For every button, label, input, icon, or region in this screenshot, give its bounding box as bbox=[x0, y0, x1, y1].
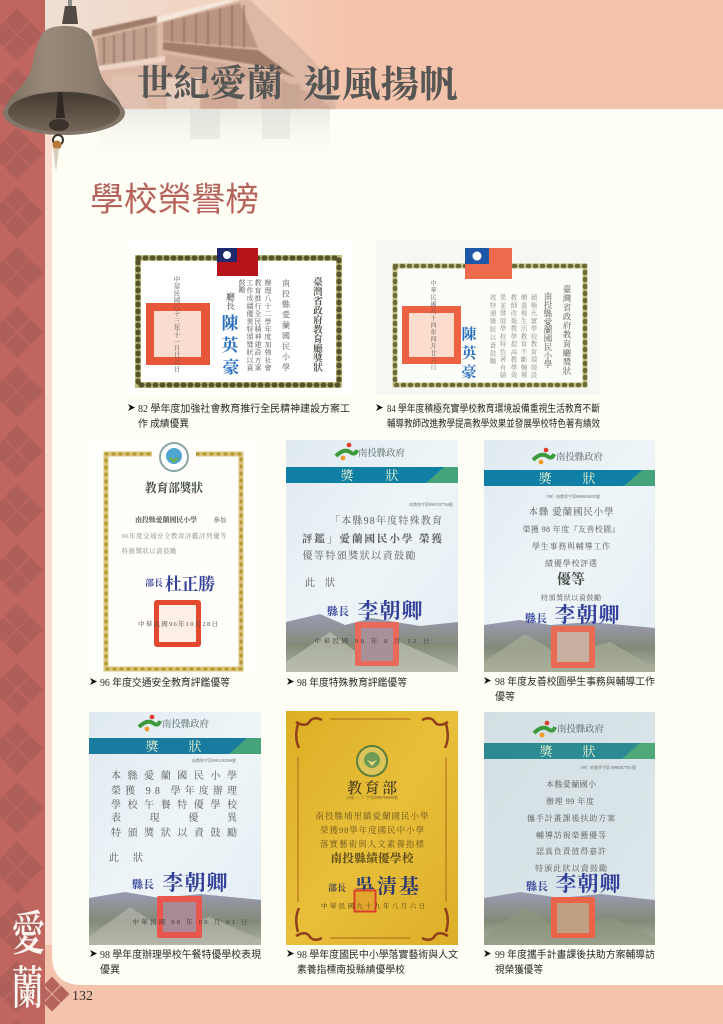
certificate 6: school lunch award: 府教特字第0981192569號 bbox=[192, 757, 236, 763]
caption 2: 輔導教師改進教學提高教學效果並發展學校特色著有績效 bbox=[387, 417, 600, 430]
certificate 2: Education department award bbox=[376, 240, 600, 395]
certificate 4: Nantou County special education award: 中華民國 98 年 8 月 12 日 bbox=[314, 636, 430, 645]
cream content panel bbox=[52, 109, 723, 985]
caption 6: 優異 bbox=[100, 963, 120, 976]
caption 1 bbox=[128, 402, 350, 430]
county logo: 南投縣政府 bbox=[557, 723, 604, 735]
certificate 4: Nantou County special education award: 獎 bbox=[340, 468, 354, 483]
certificate 3: Ministry of Education traffic safety award: 南投縣愛蘭國民小學 bbox=[135, 515, 197, 524]
certificate 6: school lunch award: 本縣愛蘭國民小學 bbox=[111, 769, 237, 782]
certificate 5: friendly campus award: 獎 bbox=[538, 471, 552, 486]
caption 7 bbox=[287, 948, 459, 976]
certificate 1: Taiwan Provincial education award: 教育推行全民精神建設方案 bbox=[254, 278, 262, 372]
certificate 2: Education department award: 豪 bbox=[461, 363, 477, 381]
certificate 1: Taiwan Provincial education award: 南投縣愛蘭國民小學 bbox=[280, 278, 290, 371]
certificate 3: Ministry of Education traffic safety award: 96年度交通安全教育評鑑評列優等 bbox=[122, 531, 227, 540]
caption 8: 視榮獲優等 bbox=[495, 963, 543, 976]
certificate 2: Education department award: 備重視生活教育不斷輔導 bbox=[520, 293, 527, 379]
caption 2 bbox=[376, 402, 600, 430]
certificate 1: Taiwan Provincial education award: 臺灣省政府教育廳獎狀 bbox=[311, 276, 323, 373]
certificate 6: school lunch award: 表 現 優 異 bbox=[111, 811, 238, 824]
left side strip with diamonds bbox=[0, 0, 45, 1024]
certificate 7: gold Ministry of Education award: 台國（二）字第0980700098號 bbox=[346, 794, 398, 800]
county logo bbox=[139, 715, 209, 731]
certificate 5: friendly campus award: 特頒獎狀以資鼓勵 bbox=[541, 593, 601, 602]
blue band bbox=[484, 743, 655, 759]
certificate 6: school lunch award: 中華民國 98 年 09 月 01 日 bbox=[132, 917, 248, 926]
certificate 4: Nantou County special education award: 優等特頒獎狀以資鼓勵 bbox=[302, 549, 416, 562]
mountains bbox=[89, 892, 261, 945]
certificate 3: Ministry of Education traffic safety award: 特頒獎狀以資鼓勵 bbox=[122, 546, 177, 555]
certificate 3: Ministry of Education traffic safety award: 參加 bbox=[214, 515, 227, 524]
certificate 4: Nantou County special education award: 「本縣98年度特殊教育 bbox=[330, 514, 442, 527]
certificate 8: after-school tutoring award: 狀 bbox=[582, 744, 596, 759]
county logo: 南投縣政府 bbox=[162, 718, 209, 730]
certificate 1: Taiwan Provincial education award: 陳 bbox=[222, 314, 238, 333]
certificate 2: Education department award: 英 bbox=[461, 344, 477, 362]
red seal bbox=[402, 306, 461, 364]
certificate 7: gold Ministry of Education award: 中華民國九十九年八月六日 bbox=[321, 901, 425, 910]
red seal bbox=[354, 890, 376, 912]
mountains bbox=[484, 620, 655, 672]
certificate 1: Taiwan Provincial education award bbox=[128, 240, 352, 395]
certificate 8: after-school tutoring award: 認真負責值得嘉許 bbox=[536, 846, 606, 856]
certificate 8: after-school tutoring award: 縣長 bbox=[526, 879, 548, 893]
caption 2: 84 學年度積極充實學校教育環境設備重視生活教育不斷 bbox=[387, 402, 600, 415]
mountains bbox=[484, 892, 655, 945]
caption 7: 素養指標南投縣績優學校 bbox=[297, 963, 406, 976]
certificate 8: after-school tutoring award: 特頒此狀以資鼓勵 bbox=[535, 863, 607, 873]
certificate 2: Education department award: 臺灣省政府教育廳獎狀 bbox=[562, 284, 572, 376]
header title bbox=[137, 63, 458, 106]
certificate 2: Education department award: 效特頒獎狀以資鼓勵 bbox=[488, 293, 496, 365]
certificate 4: Nantou County special education award bbox=[286, 440, 458, 672]
caption 1: 作 成績優異 bbox=[138, 417, 189, 430]
certificate 7: gold Ministry of Education award: 吳清基 bbox=[355, 874, 419, 898]
certificate 4: Nantou County special education award: 李朝卿 bbox=[358, 599, 422, 623]
certificate 5: friendly campus award bbox=[484, 440, 655, 672]
certificate 1: Taiwan Provincial education award: 豪 bbox=[222, 357, 240, 377]
certificate 8: after-school tutoring award: 獎 bbox=[539, 744, 553, 759]
caption 5 bbox=[484, 675, 655, 703]
certificate 1: Taiwan Provincial education award: 英 bbox=[222, 335, 240, 355]
certificate 7: gold Ministry of Education award: 教育部 bbox=[347, 779, 397, 797]
certificate 8: after-school tutoring award: 輔導訪視榮獲優等 bbox=[536, 830, 606, 840]
certificate 5: friendly campus award: （98）南教學字第0990056555號 bbox=[544, 493, 600, 499]
caption 1: 82 學年度加強社會教育推行全民精神建設方案工 bbox=[138, 402, 350, 415]
certificate 6: school lunch award: 縣長 bbox=[132, 877, 154, 891]
page number: 132 bbox=[72, 989, 93, 1004]
mountains bbox=[286, 614, 458, 672]
certificate 1: Taiwan Provincial education award: 廳長 bbox=[225, 291, 235, 311]
blue band bbox=[484, 470, 655, 486]
certificate 6: school lunch award bbox=[89, 712, 261, 945]
certificate 3: Ministry of Education traffic safety award: 教育部獎狀 bbox=[145, 480, 204, 495]
flag bbox=[217, 248, 258, 276]
caption 8: 99 年度攜手計畫課後扶助方案輔導訪 bbox=[495, 948, 655, 961]
certificate 1: Taiwan Provincial education award: 鼓勵 bbox=[238, 278, 246, 294]
blue band bbox=[286, 467, 458, 483]
certificate 7: gold Ministry of Education award: 部長 bbox=[328, 882, 346, 893]
red seal bbox=[146, 303, 210, 365]
certificate 5: friendly campus award: 縣長 bbox=[525, 611, 547, 625]
certificate 6: school lunch award: 獎 bbox=[145, 739, 159, 754]
certificate 4: Nantou County special education award: 此 狀 bbox=[305, 576, 335, 589]
certificate 8: after-school tutoring award: 本縣愛蘭國小 bbox=[546, 779, 597, 789]
certificate 2: Education department award: 教師改進教學提高教學效 bbox=[510, 293, 517, 379]
certificate 2: Education department award: 南投縣愛蘭國民小學 bbox=[543, 291, 553, 368]
certificate 8: after-school tutoring award bbox=[484, 712, 655, 945]
certificate 6: school lunch award: 狀 bbox=[188, 739, 202, 754]
certificate 4: Nantou County special education award: 縣長 bbox=[327, 604, 349, 618]
certificate 2: Education department award: 陳 bbox=[461, 326, 477, 343]
certificate 8: after-school tutoring award: 攜手計畫課後扶助方案 bbox=[527, 813, 615, 823]
certificate 3: Ministry of Education traffic safety award: 中華民國96年10月28日 bbox=[138, 619, 218, 628]
certificate 7: gold Ministry of Education award: 南投縣埔里鎮愛蘭國民小學 bbox=[316, 811, 429, 821]
certificate 4: Nantou County special education award: 南教特字第0991197704號 bbox=[409, 501, 453, 507]
caption 7: 98 學年度國民中小學落實藝術與人文 bbox=[297, 948, 459, 961]
county logo bbox=[533, 448, 603, 464]
certificate 3: Ministry of Education traffic safety award: 杜正勝 bbox=[165, 575, 215, 594]
pale inner strip bbox=[45, 109, 52, 945]
certificate 5: friendly campus award: 榮獲 98 年度『友善校園』 bbox=[522, 524, 620, 534]
county logo bbox=[534, 721, 604, 737]
footer calligraphy: 蘭 bbox=[12, 963, 43, 1014]
county logo: 南投縣政府 bbox=[358, 447, 405, 459]
certificate 6: school lunch award: 榮獲 98 學年度辦理 bbox=[111, 784, 237, 797]
blue band bbox=[89, 738, 261, 754]
certificate 1: Taiwan Provincial education award: 工作成績優異特頒獎狀以資 bbox=[246, 279, 254, 372]
certificate 8: after-school tutoring award: 辦理 99 年度 bbox=[546, 796, 594, 806]
certificate 6: school lunch award: 李朝卿 bbox=[162, 871, 228, 895]
header title: 世紀愛蘭 bbox=[137, 63, 283, 105]
certificate 6: school lunch award: 此 狀 bbox=[109, 851, 143, 864]
footer diamonds bbox=[34, 976, 70, 1012]
caption 6: 98 學年度辦理學校午餐特優學校表現 bbox=[100, 948, 262, 961]
certificate 7: gold Ministry of Education award: 南投縣績優學校 bbox=[330, 851, 415, 865]
red seal bbox=[551, 897, 595, 938]
certificate 5: friendly campus award: 狀 bbox=[582, 471, 596, 486]
certificate 5: friendly campus award: 李朝卿 bbox=[554, 603, 620, 627]
certificate 7: gold Ministry of Education award: 落實藝術與人文素養指標 bbox=[320, 839, 424, 849]
footer calligraphy bbox=[12, 908, 45, 1014]
certificate 8: after-school tutoring award: （99）府教學字第 0990207703 號 bbox=[578, 764, 636, 770]
certificate 7: gold Ministry of Education award bbox=[286, 711, 458, 945]
emblem bbox=[160, 443, 188, 471]
county logo bbox=[336, 443, 405, 460]
caption 8 bbox=[484, 948, 655, 976]
red seal bbox=[154, 600, 201, 647]
certificate 8: after-school tutoring award: 李朝卿 bbox=[556, 872, 620, 896]
certificate 2: Education department award: 中華民國八十四年四月廿六日 bbox=[429, 279, 436, 371]
county logo: 南投縣政府 bbox=[556, 451, 603, 463]
certificate 1: Taiwan Provincial education award: 辦理八十二學年度加強社會 bbox=[264, 278, 272, 372]
certificate 5: friendly campus award: 績優學校評選 bbox=[545, 558, 598, 568]
certificate 5: friendly campus award: 學生事務與輔導工作 bbox=[532, 541, 610, 551]
red seal bbox=[157, 896, 202, 938]
certificate 2: Education department award: 果並發展學校特色著有績 bbox=[498, 293, 506, 379]
emblem bbox=[357, 746, 387, 776]
certificate 5: friendly campus award: 本縣 愛蘭國民小學 bbox=[528, 506, 614, 518]
header title: 迎風揚帆 bbox=[303, 64, 458, 106]
red seal bbox=[551, 626, 595, 668]
certificate 4: Nantou County special education award: 評鑑」愛蘭國民小學 榮獲 bbox=[302, 532, 442, 545]
certificate 2: Education department award: 積極充實學校教育環境設 bbox=[530, 293, 537, 379]
certificate 4: Nantou County special education award: 狀 bbox=[385, 468, 399, 483]
certificate 6: school lunch award: 學校午餐特優學校 bbox=[111, 798, 238, 811]
caption 5: 98 年度友善校園學生事務與輔導工作 bbox=[495, 675, 655, 688]
caption 4: 98 年度特殊教育評鑑優等 bbox=[297, 676, 407, 689]
footer calligraphy: 愛 bbox=[12, 908, 45, 961]
caption 5: 優等 bbox=[495, 690, 515, 703]
certificate 3: Ministry of Education traffic safety award: 部長 bbox=[145, 577, 163, 588]
red seal bbox=[355, 622, 399, 666]
header photo: old school building bbox=[45, 0, 345, 164]
certificate 3: Ministry of Education traffic safety award bbox=[90, 440, 258, 672]
icon: bell bbox=[3, 0, 125, 172]
certificate 7: gold Ministry of Education award: 榮獲98學年度國民中小學 bbox=[320, 825, 424, 835]
certificate 6: school lunch award: 特頒獎狀以資鼓勵 bbox=[111, 826, 237, 839]
caption 3: 96 年度交通安全教育評鑑優等 bbox=[100, 676, 230, 689]
certificate 1: Taiwan Provincial education award: 中華民國八十三年十一月廿六日 bbox=[172, 275, 180, 373]
caption 6 bbox=[90, 948, 262, 976]
flag bbox=[465, 248, 512, 279]
certificate 5: friendly campus award: 優等 bbox=[557, 571, 585, 588]
heading: 學校榮譽榜 bbox=[90, 172, 259, 221]
